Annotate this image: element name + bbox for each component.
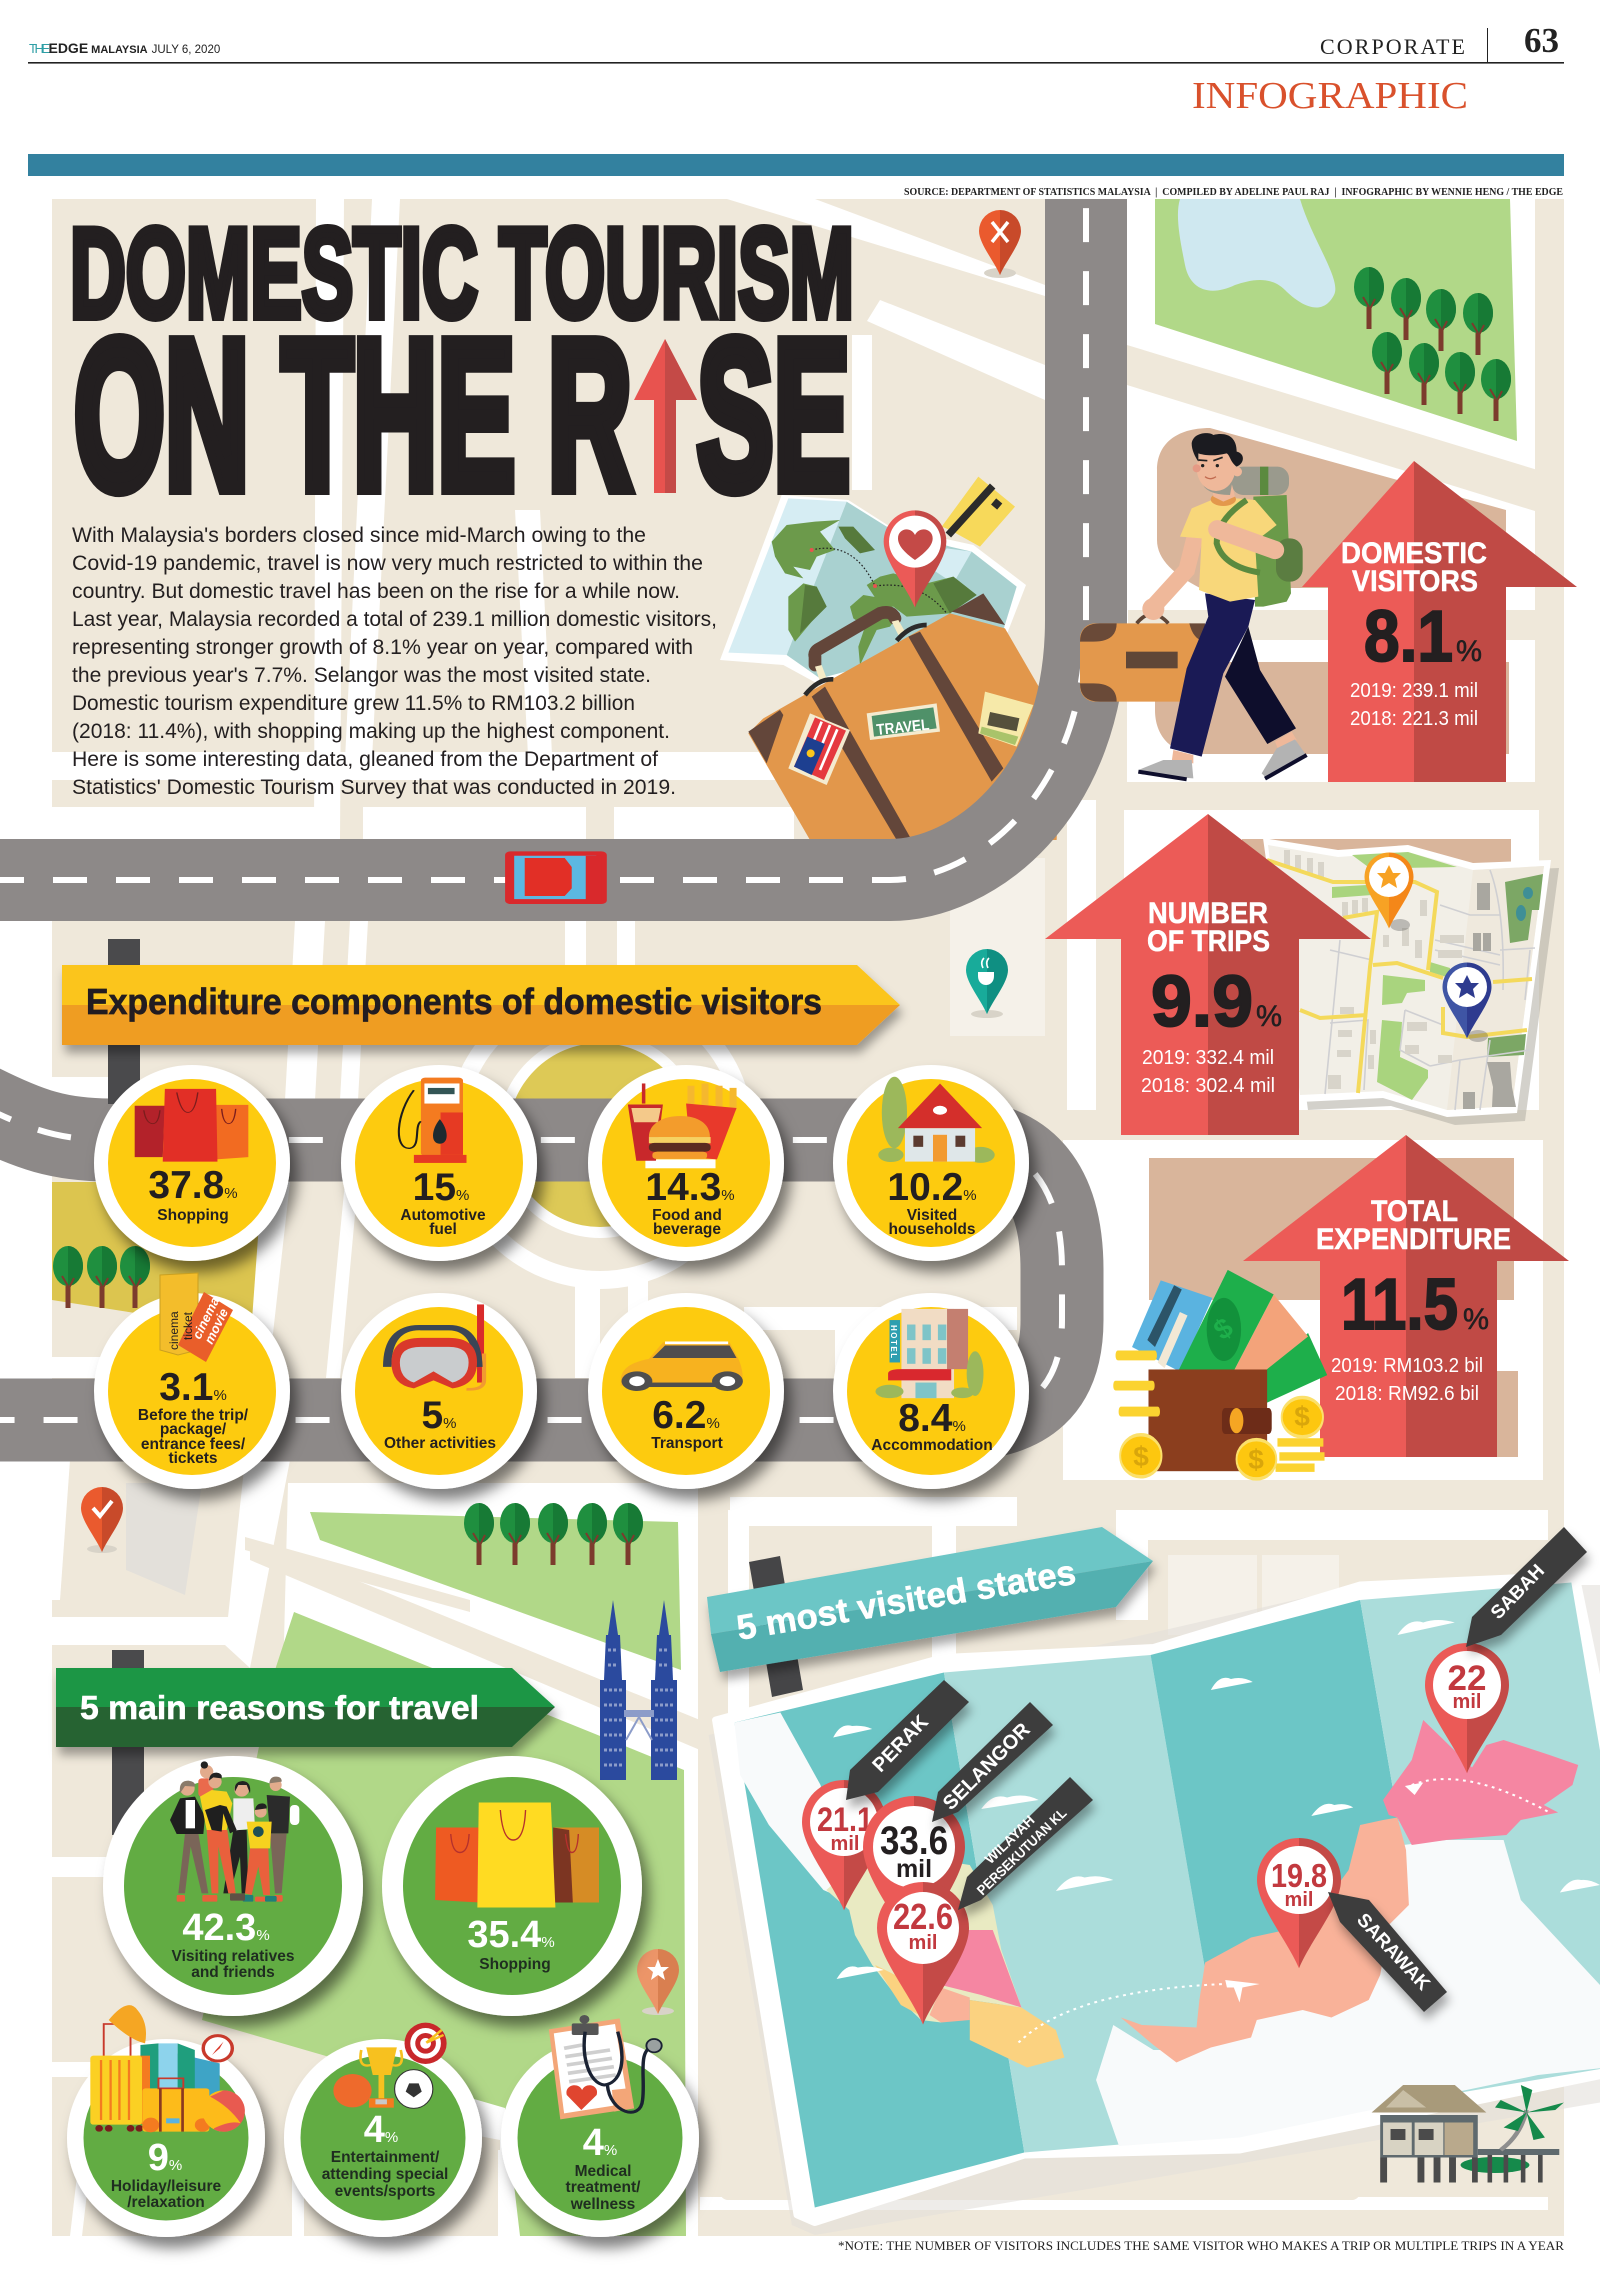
tag: perak: PERAK: [868, 1711, 933, 1777]
item: holiday 9%: [67, 2005, 265, 2237]
pin: selangor: 33.6: [880, 1819, 948, 1863]
icon: shopping bags: [435, 1802, 599, 1908]
icon: credit card: [942, 477, 1015, 547]
icon: red car on road: [505, 851, 607, 904]
yearly values: 2019: RM103.2 bil: [1331, 1355, 1483, 1377]
masthead name and date: THEEDGE MALAYSIA JULY 6, 2020: [29, 40, 220, 56]
item: accommodation 8.4%: Accommodation: [871, 1437, 993, 1454]
teal band: [28, 154, 1564, 176]
item: entertainment 4%: Entertainment/: [331, 2149, 440, 2166]
item: shopping 35.4%: 35.4%: [467, 1914, 555, 1956]
icon: tickets: cinema: [167, 1311, 181, 1350]
trees: [53, 1246, 150, 1308]
item: medical 4%: treatment/: [566, 2179, 641, 2196]
panel: most visited states map: [707, 1527, 1600, 2235]
intro text block: the previous year's 7.7%. Selangor was the most visited state.: [72, 664, 651, 687]
icon: navy star pin: [1442, 962, 1492, 1042]
arrow: [1243, 1135, 1569, 1457]
heading: [1147, 897, 1270, 958]
heading: VISITORS: [1352, 565, 1478, 598]
title line two, after arrow: SE: [697, 296, 850, 533]
icon: heart map pin: [884, 510, 946, 607]
hotel sign: HOTEL: [889, 1325, 898, 1360]
clouds: [833, 1620, 1600, 1979]
intro text block: Here is some interesting data, gleaned from the Department of: [72, 748, 658, 771]
item: before the trip 3.1%: 3.1%: [159, 1366, 227, 1409]
item: entertainment 4%: attending special: [322, 2166, 448, 2183]
heading: TOTAL: [1371, 1195, 1458, 1228]
panel: reasons for travel: [56, 1600, 699, 2237]
pin: wilayah persekutuan kl: 22.6: [893, 1896, 953, 1937]
white land: borneo: [1096, 1840, 1600, 2146]
item: holiday 9%: Holiday/leisure: [111, 2178, 222, 2195]
intro text block: representing stronger growth of 8.1% year on year, compared with: [72, 636, 693, 659]
pin: sarawak: 19.8: [1271, 1857, 1327, 1894]
banner heading: [707, 1527, 1153, 1672]
coin and banknote symbols: $: [1208, 1311, 1239, 1346]
signpost: [112, 1650, 144, 1835]
tan backdrop: [1149, 1158, 1518, 1457]
panel: domestic visitors: [1080, 428, 1577, 782]
signpost: [749, 1556, 803, 1697]
item: automotive fuel 15%: 15%: [413, 1166, 469, 1209]
pin: selangor: mil: [896, 1855, 932, 1883]
item: visiting relatives 42.3%: and friends: [191, 1964, 275, 1981]
item: shopping 37.8%: [94, 1065, 290, 1261]
item: food and beverage 14.3%: [588, 1065, 784, 1261]
arrow: [1045, 814, 1371, 1135]
light blocks: [950, 858, 1339, 1635]
item: visiting relatives 42.3%: 42.3%: [182, 1907, 270, 1949]
right column panels: [1127, 199, 1535, 782]
item: shopping 37.8%: 37.8%: [148, 1164, 238, 1207]
beige bands over the white panels: [245, 345, 1564, 2200]
yearly values: [1141, 1047, 1275, 1097]
yearly values: 2019: 239.1 mil: [1350, 680, 1478, 702]
park: top right with pond: [1155, 199, 1517, 441]
icon: tickets: ticket: [181, 1311, 195, 1340]
trees: [1354, 267, 1511, 421]
pin: perak: mil: [831, 1833, 859, 1855]
intro text block: Domestic tourism expenditure grew 11.5% to RM103.2 billion: [72, 692, 635, 715]
item: holiday 9%: /relaxation: [127, 2194, 205, 2211]
yearly values: [1350, 680, 1478, 730]
arrow: [1302, 461, 1577, 782]
heading: EXPENDITURE: [1316, 1223, 1511, 1256]
pin: sabah: [1425, 1643, 1509, 1773]
white land: sumatra: [734, 1712, 846, 1900]
item: shopping 37.8%: Shopping: [157, 1207, 229, 1224]
item: medical 4%: wellness: [570, 2196, 635, 2213]
intro text block: (2018: 11.4%), with shopping making up the highest component.: [72, 720, 670, 743]
pin: sarawak: mil: [1285, 1889, 1313, 1911]
title: DOMESTIC TOURISM: [70, 202, 854, 344]
item: other activities 5%: [341, 1293, 537, 1489]
intro text block: With Malaysia's borders closed since mid-March owing to the: [72, 524, 646, 547]
item: before the trip 3.1%: [94, 1273, 290, 1489]
illustration: wallet, cards, money and coins: [1113, 1270, 1327, 1479]
heading: NUMBER: [1148, 897, 1268, 930]
map pin: check: [81, 1487, 123, 1553]
panel: expenditure components: [53, 939, 1029, 1489]
figure: %: [1456, 635, 1482, 668]
tag: selangor: SELANGOR: [939, 1719, 1035, 1815]
pin: sarawak: [1257, 1838, 1341, 1968]
banner heading: [56, 1668, 555, 1747]
icon: tickets: movie: [201, 1306, 231, 1346]
item: medical 4%: 4%: [583, 2122, 617, 2164]
item: other activities 5%: 5%: [421, 1394, 457, 1437]
item: entertainment 4%: events/sports: [335, 2183, 435, 2200]
parks: lower left: [202, 1512, 700, 2236]
figure: 9.9: [1151, 962, 1253, 1042]
icon: snorkel mask: [387, 1304, 484, 1389]
trees: middle park: [464, 1503, 643, 1565]
illustration: world map behind suitcase: [720, 495, 1026, 685]
icon: trophy, ball and target: [333, 2023, 447, 2108]
item: shopping 35.4%: [382, 1756, 642, 2016]
heading: OF TRIPS: [1147, 925, 1270, 958]
yearly values: 2018: 221.3 mil: [1350, 708, 1478, 730]
item: visited households 10.2%: households: [889, 1221, 975, 1238]
icon: orange star pin: [1364, 852, 1414, 931]
pin: wilayah persekutuan kl: [877, 1882, 969, 2025]
streets under the first road: [285, 921, 325, 1100]
icon: luggage, map and beach ball: [90, 2005, 245, 2132]
item: transport 6.2%: 6.2%: [652, 1394, 720, 1437]
item: before the trip 3.1%: Before the trip/: [138, 1407, 249, 1424]
tan backdrop: [1155, 428, 1509, 754]
tag: perak: [846, 1680, 969, 1800]
tag: sabah: SABAH: [1487, 1561, 1549, 1624]
icon: yellow car: [621, 1341, 743, 1391]
item: visited households 10.2%: [833, 1065, 1029, 1261]
section name: CORPORATE: [1320, 34, 1466, 59]
sarawak: [1121, 1818, 1409, 2062]
pin: perak: 21.1: [817, 1801, 873, 1839]
icon: tickets: cinema: [189, 1294, 222, 1341]
header: masthead line: [28, 21, 1564, 117]
tag: wilayah persekutuan kl: PERSEKUTUAN KL: [974, 1804, 1070, 1898]
figure: 8.1: [1364, 597, 1453, 677]
signpost: [108, 939, 140, 1104]
pin: wilayah persekutuan kl: mil: [909, 1932, 937, 1954]
yearly values: [1331, 1355, 1483, 1405]
illustration: folded city map: [1263, 838, 1559, 1125]
coin and banknote symbols: $: [1294, 1401, 1310, 1432]
item: before the trip 3.1%: package/: [160, 1421, 227, 1438]
section label: infographic: INFOGRAPHIC: [1192, 75, 1468, 117]
source credit line: SOURCE: DEPARTMENT OF STATISTICS MALAYSIA | COMPILED BY ADELINE PAUL RAJ | INFOGRAPHIC BY WENNIE HENG / THE EDGE: [904, 187, 1563, 198]
map pin: coffee: [966, 949, 1008, 1018]
illustration: traveller with suitcase: [1080, 433, 1307, 779]
item: before the trip 3.1%: tickets: [168, 1450, 218, 1467]
item: visiting relatives 42.3%: Visiting relatives: [172, 1948, 294, 1965]
road: middle loop: [0, 1105, 1062, 1420]
tag: wilayah persekutuan kl: [958, 1777, 1093, 1910]
intro text block: [72, 524, 717, 799]
heading: [1341, 537, 1487, 598]
item: automotive fuel 15%: Automotive: [400, 1207, 486, 1224]
icon: hotel building: [875, 1309, 984, 1398]
item: shopping 35.4%: Shopping: [479, 1956, 551, 1973]
map pin: dining: [979, 210, 1021, 278]
tag: sarawak: SARAWAK: [1352, 1910, 1434, 1995]
figure: %: [1256, 1000, 1282, 1033]
illustration: suitcase: [748, 593, 1060, 840]
pin: sabah: mil: [1453, 1691, 1481, 1713]
item: transport 6.2%: Transport: [651, 1435, 723, 1452]
item: visited households 10.2%: Visited: [907, 1207, 957, 1224]
panel: total expenditure: [1113, 1135, 1569, 1479]
pin: perak: [802, 1780, 886, 1910]
suitcase label: TRAVEL: [876, 717, 930, 739]
figure: %: [1463, 1303, 1489, 1336]
figure: 11.5: [1341, 1265, 1458, 1345]
road: top vertical and horizontal: [0, 199, 1086, 880]
sabah: [1383, 1720, 1578, 1845]
title: [70, 202, 854, 533]
intro text block: Covid-19 pandemic, travel is now very much restricted to within the: [72, 552, 703, 575]
tan backdrop: [1242, 839, 1511, 867]
item: accommodation 8.4%: [833, 1293, 1029, 1489]
intro text block: country. But domestic travel has been on the rise for a while now.: [72, 580, 680, 603]
item: other activities 5%: Other activities: [384, 1435, 496, 1452]
streets under the second road: [52, 1460, 70, 1600]
tag: sarawak: [1328, 1892, 1447, 2012]
page number: 63: [1524, 21, 1559, 60]
coin and banknote symbols: $: [1248, 1444, 1264, 1475]
heading: [1316, 1195, 1511, 1256]
heading: DOMESTIC: [1341, 537, 1487, 570]
yearly values: 2018: 302.4 mil: [1141, 1075, 1275, 1097]
icon: family group: [170, 1761, 299, 1902]
item: medical 4%: [501, 2015, 699, 2237]
coin and banknote symbols: [1133, 1311, 1310, 1475]
banner text: 5 most visited states: [734, 1553, 1079, 1648]
peninsular states: [826, 1850, 1021, 2022]
icon: twin towers: [600, 1600, 677, 1780]
banner text: Expenditure components of domestic visitors: [86, 981, 822, 1022]
footnote: *NOTE: THE NUMBER OF VISITORS INCLUDES THE SAME VISITOR WHO MAKES A TRIP OR MULTIPLE TRIPS IN A YEAR: [838, 2238, 1564, 2253]
icon: tickets: [160, 1273, 233, 1362]
title line two, before arrow: ON THE R: [74, 296, 632, 533]
item: automotive fuel 15%: fuel: [429, 1221, 457, 1238]
tag: wilayah persekutuan kl: WILAYAH: [981, 1812, 1038, 1867]
banner heading: [62, 965, 900, 1045]
pin: selangor: [863, 1796, 965, 1954]
item: visited households 10.2%: 10.2%: [887, 1166, 977, 1209]
top left streets: [314, 199, 344, 839]
item: holiday 9%: 9%: [148, 2137, 182, 2179]
item: accommodation 8.4%: 8.4%: [898, 1397, 966, 1440]
stilt house and palm: [1372, 2085, 1564, 2182]
tag: selangor: [932, 1702, 1053, 1822]
pin: sabah: 22: [1448, 1659, 1486, 1698]
item: automotive fuel 15%: [341, 1065, 537, 1261]
banner text: 5 main reasons for travel: [80, 1689, 479, 1726]
item: food and beverage 14.3%: 14.3%: [645, 1166, 735, 1209]
panel: number of trips: [1045, 814, 1559, 1135]
yearly values: 2018: RM92.6 bil: [1335, 1383, 1479, 1405]
item: food and beverage 14.3%: Food and: [652, 1207, 722, 1224]
coin and banknote symbols: $: [1133, 1441, 1149, 1472]
item: entertainment 4%: 4%: [364, 2109, 398, 2151]
map pin: star: [637, 1949, 679, 2015]
intro text block: Last year, Malaysia recorded a total of 239.1 million domestic visitors,: [72, 608, 717, 631]
yearly values: 2019: 332.4 mil: [1142, 1047, 1274, 1069]
item: visiting relatives 42.3%: [103, 1756, 363, 2016]
intro text block: Statistics' Domestic Tourism Survey that was conducted in 2019.: [72, 776, 676, 799]
item: before the trip 3.1%: entrance fees/: [141, 1436, 246, 1453]
item: food and beverage 14.3%: beverage: [653, 1221, 721, 1238]
tag: sabah: [1466, 1527, 1587, 1647]
item: entertainment 4%: [284, 2023, 482, 2237]
icon: red arrow forming the letter I: [634, 339, 697, 493]
icon: clipboard and stethoscope: [549, 2015, 662, 2119]
folded map: [709, 1575, 1600, 2235]
item: transport 6.2%: [588, 1293, 784, 1489]
ground patches: olive block and roundabout: [52, 990, 745, 1320]
item: medical 4%: Medical: [575, 2163, 631, 2180]
